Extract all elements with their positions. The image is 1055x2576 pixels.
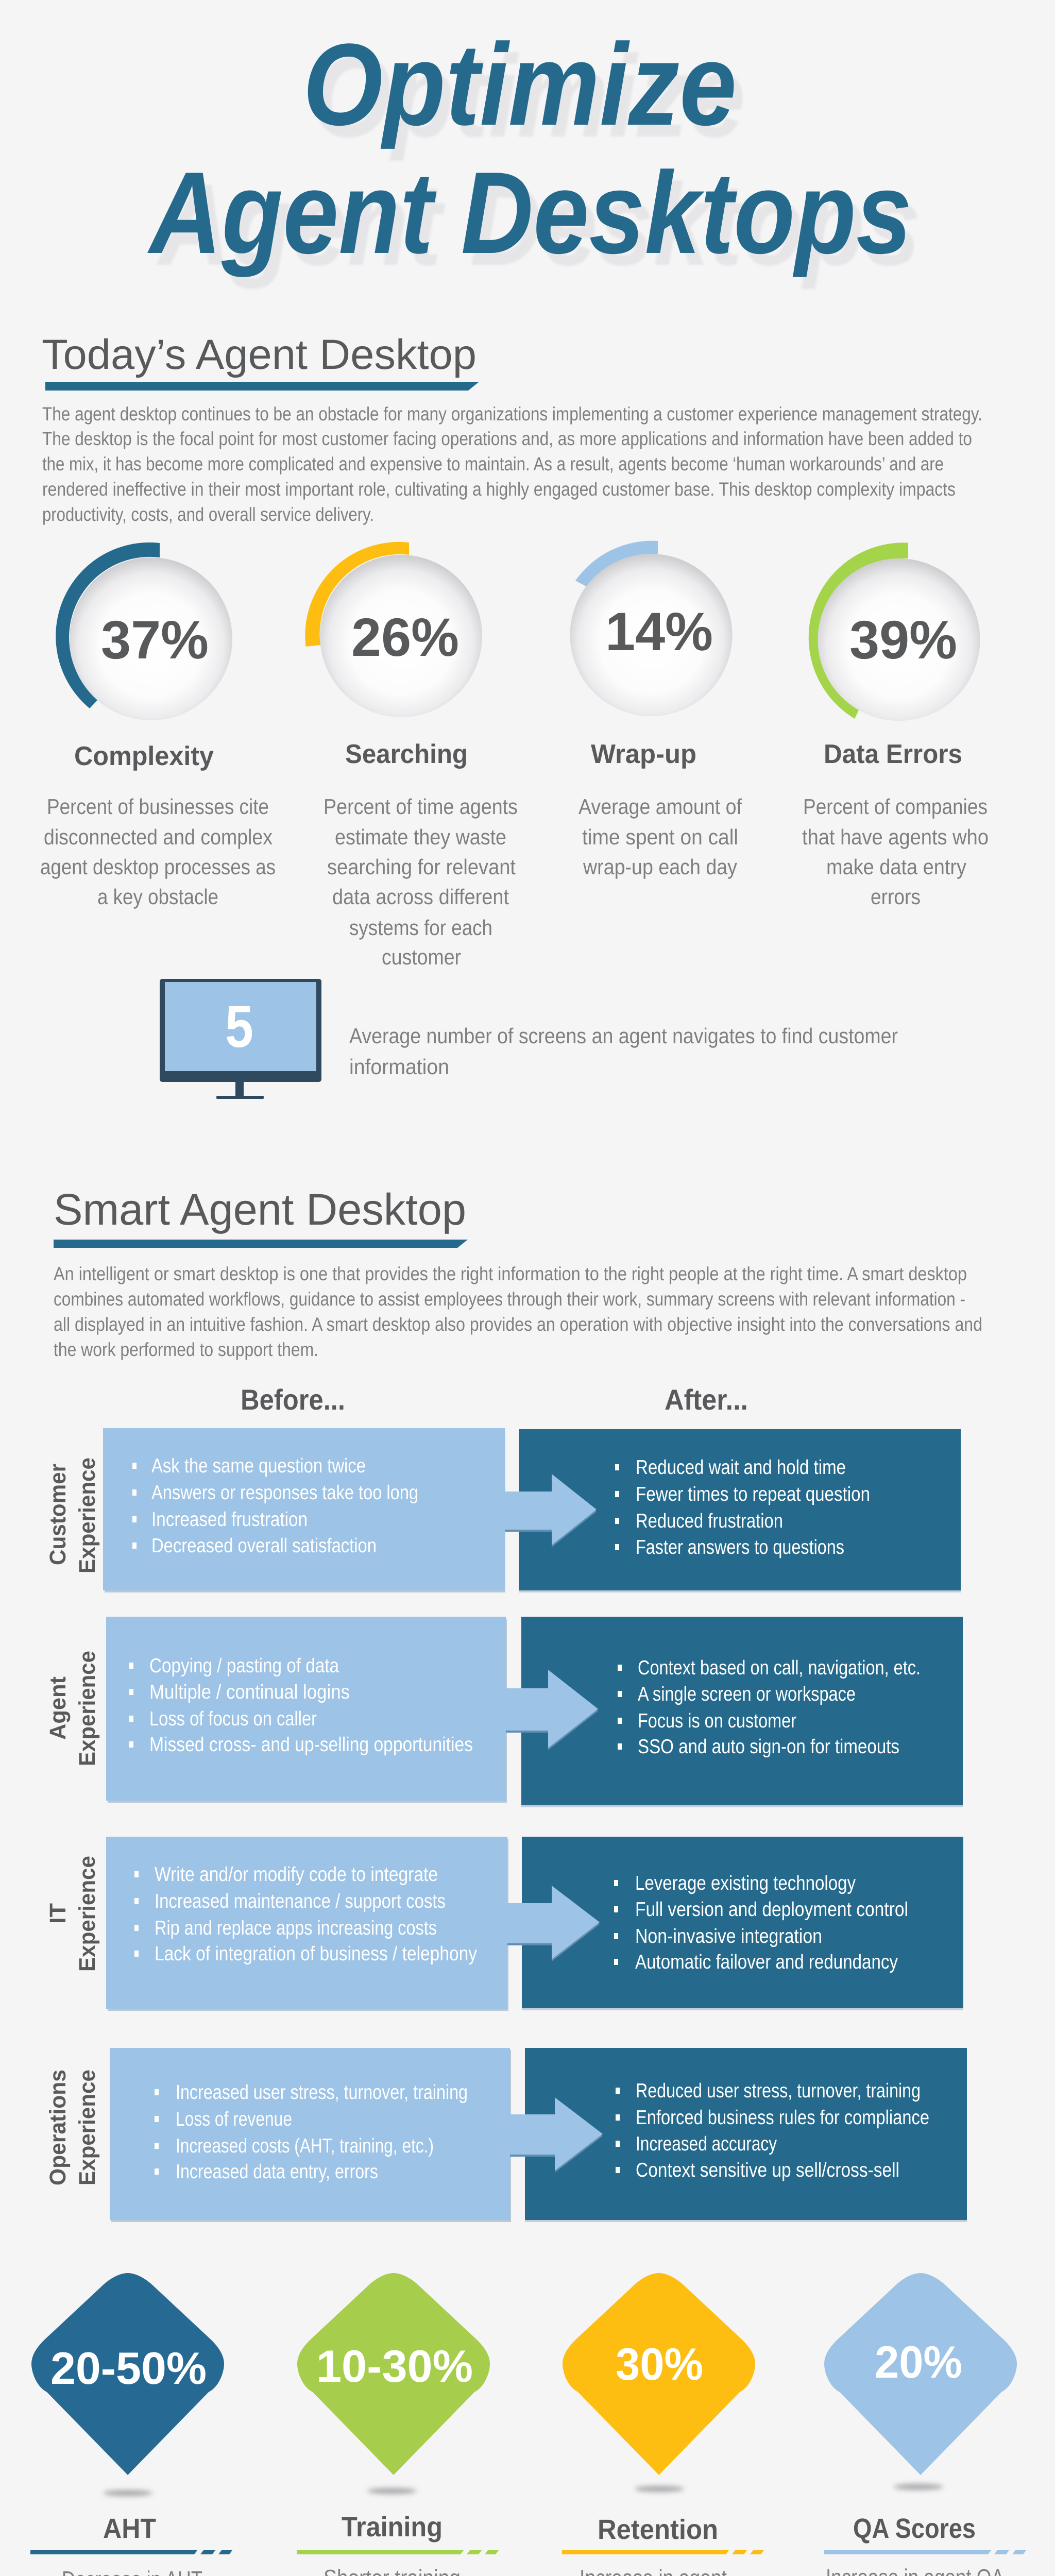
before box: Lack of integration of business / telephony (155, 1943, 477, 1965)
row: IT experience (45, 1837, 963, 2011)
after box: Automatic failover and redundancy (635, 1951, 898, 1973)
metric: QA scores (824, 2273, 1026, 2576)
row label (45, 2070, 100, 2185)
row: agent experience (45, 1617, 963, 1807)
smart desktop paragraph (54, 1263, 982, 1360)
panel: benefit metrics (30, 2273, 1026, 2576)
before box (103, 1428, 505, 1592)
stat: data errors 39%: make data entry (826, 855, 966, 879)
row label: Experience (75, 1856, 100, 1972)
icon: monitor with 5 screens: 5 (225, 994, 253, 1060)
stat: complexity 37% (40, 543, 276, 909)
stat: complexity 37%: Percent of businesses cite (47, 794, 269, 819)
stat: complexity 37%: Complexity (74, 741, 214, 771)
after box: Focus is on customer (638, 1710, 796, 1732)
stat: data errors 39% (802, 543, 989, 909)
stat: searching 26%: Percent of time agents (324, 794, 518, 819)
stat: data errors 39%: errors (871, 885, 921, 909)
row label: Experience (75, 1458, 100, 1573)
metric: QA scores: 20% (875, 2336, 962, 2387)
before box: Missed cross- and up-selling opportunities (149, 1734, 473, 1756)
title: Optimize (312, 31, 745, 161)
after box (519, 1429, 961, 1592)
title: Agent Desktops (156, 159, 921, 290)
arrow: before to after (510, 2097, 603, 2173)
before box: Multiple / continual logins (149, 1681, 350, 1703)
stat: complexity 37%: agent desktop processes as (40, 855, 276, 879)
stat: wrap-up 14%: Average amount of (578, 794, 742, 819)
row label: Customer (45, 1464, 71, 1565)
metric: AHT: AHT (103, 2513, 156, 2544)
before box: Ask the same question twice (151, 1455, 366, 1477)
icon: monitor with 5 screens (160, 979, 321, 1099)
before box: Loss of focus on caller (149, 1708, 317, 1730)
after box (525, 2048, 967, 2222)
title: Agent Desktops (147, 147, 912, 278)
stat: searching 26% (305, 542, 518, 969)
after box: Increased accuracy (636, 2133, 777, 2155)
heading underline bar (54, 1240, 468, 1248)
before box: Write and/or modify code to integrate (155, 1863, 438, 1886)
panel: today's agent desktop (40, 331, 989, 1099)
metric: AHT (30, 2273, 232, 2576)
after box: Leverage existing technology (635, 1872, 856, 1894)
row label (45, 1856, 100, 1972)
heading: today's agent desktop: Today’s Agent Desktop (42, 331, 477, 378)
after box: Context based on call, navigation, etc. (638, 1657, 921, 1679)
after box: Non-invasive integration (635, 1925, 822, 1947)
stat: data errors 39%: that have agents who (802, 825, 989, 849)
after box: A single screen or workspace (638, 1683, 856, 1705)
row label (45, 1651, 100, 1766)
stat: searching 26%: data across different (332, 885, 509, 909)
metric: QA scores: QA Scores (853, 2513, 976, 2544)
before box: Increased frustration (151, 1509, 308, 1531)
title: Optimize (303, 19, 737, 149)
before box: Loss of revenue (176, 2108, 292, 2130)
metric: training: Training (342, 2512, 443, 2543)
metric: retention: Retention (598, 2514, 718, 2545)
stat: searching 26%: Searching (345, 739, 468, 769)
panel: smart agent desktop (45, 1185, 982, 2222)
before box: Increased maintenance / support costs (155, 1890, 446, 1912)
row label: Operations (45, 2070, 71, 2185)
monitor caption: information (349, 1055, 449, 1079)
row label (45, 1458, 100, 1573)
before box (106, 1617, 507, 1803)
after box (521, 1617, 963, 1807)
metric: retention: 30% (616, 2338, 703, 2389)
before box: Answers or responses take too long (151, 1482, 418, 1504)
after box: Fewer times to repeat question (636, 1483, 870, 1505)
before box (110, 2048, 511, 2222)
intro paragraph: productivity, costs, and overall service delivery. (42, 504, 374, 525)
smart desktop paragraph: the work performed to support them. (54, 1339, 318, 1360)
stat: wrap-up 14% (570, 541, 742, 879)
stat: data errors 39%: Percent of companies (803, 794, 988, 819)
before box: Rip and replace apps increasing costs (155, 1917, 437, 1939)
row label: Experience (75, 2070, 100, 2185)
row label: Experience (75, 1651, 100, 1766)
heading underline bar (45, 382, 479, 391)
intro paragraph (42, 403, 982, 525)
stat: searching 26%: systems for each (349, 916, 492, 940)
after box: SSO and auto sign-on for timeouts (638, 1736, 899, 1758)
stat: complexity 37%: disconnected and complex (44, 825, 273, 849)
row label: Agent (45, 1676, 71, 1740)
row label: IT (45, 1903, 71, 1924)
stat: complexity 37%: 37% (101, 610, 209, 670)
before box: Copying / pasting of data (149, 1655, 339, 1677)
after box: Enforced business rules for compliance (636, 2107, 929, 2129)
before box: Decreased overall satisfaction (151, 1535, 377, 1557)
after box: Context sensitive up sell/cross-sell (636, 2159, 899, 2181)
before box (106, 1837, 508, 2011)
stat: searching 26%: searching for relevant (327, 855, 516, 879)
title (147, 19, 921, 290)
arrow: before to after (505, 1474, 597, 1547)
row: customer experience (45, 1428, 961, 1592)
before box: Increased data entry, errors (176, 2161, 378, 2183)
stat: wrap-up 14%: 14% (605, 602, 713, 662)
stat: wrap-up 14%: wrap-up each day (583, 855, 737, 879)
monitor caption: Average number of screens an agent navigates to find customer (349, 1024, 898, 1048)
after box: Full version and deployment control (635, 1899, 908, 1921)
row: operations experience (45, 2048, 967, 2222)
heading: smart agent desktop: Smart Agent Desktop (54, 1185, 466, 1234)
metric: AHT: 20-50% (50, 2343, 207, 2394)
after box: Reduced wait and hold time (636, 1456, 846, 1479)
arrow: before to after (507, 1886, 600, 1961)
stat: complexity 37%: a key obstacle (97, 885, 218, 909)
after box: Reduced frustration (636, 1510, 783, 1532)
after box: Faster answers to questions (636, 1536, 844, 1558)
metric: training: 10-30% (316, 2341, 473, 2392)
stat: wrap-up 14%: time spent on call (582, 825, 738, 849)
after box: Reduced user stress, turnover, training (636, 2080, 921, 2102)
before box: Increased user stress, turnover, training (176, 2081, 468, 2104)
stat: data errors 39%: 39% (849, 610, 957, 670)
metric: training (297, 2273, 499, 2576)
after box (522, 1837, 963, 2010)
metric: retention (562, 2273, 764, 2576)
stat: searching 26%: estimate they waste (335, 825, 506, 849)
arrow: before to after (506, 1670, 598, 1750)
monitor caption (349, 1024, 898, 1079)
before box: Increased costs (AHT, training, etc.) (176, 2135, 434, 2157)
stat: data errors 39%: Data Errors (824, 739, 962, 769)
column heading: after: After... (665, 1383, 748, 1416)
stat: searching 26%: 26% (351, 607, 459, 668)
column heading: before: Before... (241, 1383, 345, 1416)
stat: searching 26%: customer (382, 945, 461, 969)
stat: wrap-up 14%: Wrap-up (591, 739, 696, 769)
